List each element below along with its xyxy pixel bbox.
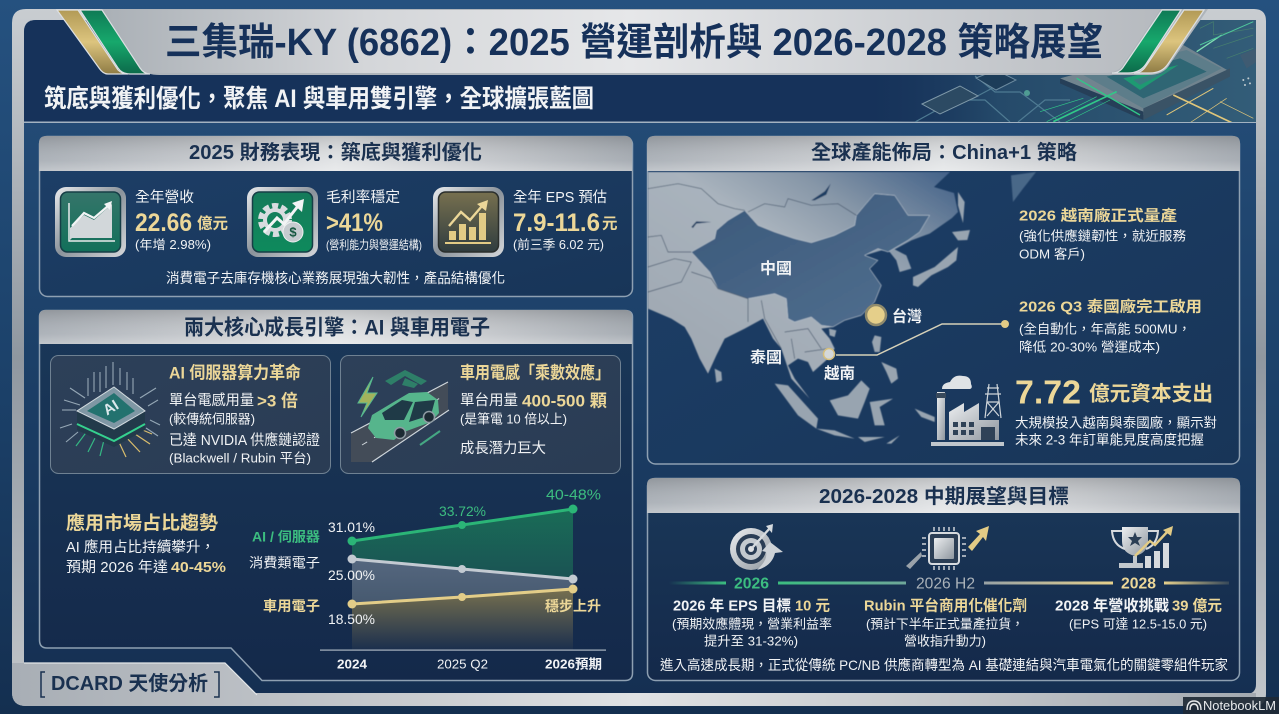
header band xyxy=(24,20,1256,123)
icon: EPS bars xyxy=(433,187,504,257)
line chart: market share xyxy=(249,486,606,672)
subtitle: 筑底與獲利優化，聚焦 AI 與車用雙引擎，全球擴張藍圖 xyxy=(44,85,594,113)
capex callout: 7.72 xyxy=(1015,374,1081,410)
automotive text xyxy=(460,362,610,457)
line chart: market share: 40-48% xyxy=(546,486,601,504)
panel: global capacity xyxy=(647,136,1240,464)
marker: Taiwan: 台灣 xyxy=(892,306,922,326)
market share trend text: 40-45% xyxy=(171,560,226,576)
AI server text xyxy=(169,362,320,466)
AI server text: (較傳統伺服器) xyxy=(169,412,255,426)
panel: outlook 2026-2028 xyxy=(647,478,1240,680)
milestone: 2026 H2: 營收指升動力) xyxy=(904,634,986,648)
icon: target xyxy=(730,524,783,570)
automotive text: 成長潛力巨大 xyxy=(460,440,546,457)
gross margin metric: >41% xyxy=(326,209,383,237)
panel heading: 全球產能佈局：China+1 策略 xyxy=(811,140,1077,164)
map of Asia xyxy=(648,172,1036,444)
title: 三集瑞-KY (6862)：2025 營運剖析與 2026-2028 策略展望 xyxy=(165,22,1103,64)
EPS metric xyxy=(513,189,618,252)
marker: Taiwan xyxy=(866,305,922,326)
line chart: market share: 穩步上升 xyxy=(545,598,601,614)
left gold and green ribbons xyxy=(57,10,150,74)
callout: Vietnam plant xyxy=(1019,206,1186,262)
milestone: 2026: 提升至 31-32%) xyxy=(704,634,798,648)
market share trend text: 預期 2026 年達 xyxy=(66,559,169,576)
line chart: market share: 33.72% xyxy=(439,503,486,519)
circuit board artwork xyxy=(860,20,1257,125)
AI server text: 已達 NVIDIA 供應鏈認證 xyxy=(169,431,320,449)
line chart: market share: 18.50% xyxy=(328,611,375,627)
callout: Thailand plant: (全自動化，年高能 500MU， xyxy=(1019,322,1191,336)
conclusion: 進入高速成長期，正式從傳統 PC/NB 供應商轉型為 AI 基礎連結與汽車電氣化的關鍵零組件玩家 xyxy=(660,657,1228,673)
revenue metric xyxy=(135,189,229,252)
gross margin metric: (營利能力與營運結構) xyxy=(326,237,422,252)
icon: gross margin gear: $ xyxy=(289,224,297,240)
revenue metric: 億元 xyxy=(197,214,229,232)
timeline: 2028 xyxy=(1121,576,1156,592)
capex callout: 大規模投入越南與泰國廠，顯示對 xyxy=(1015,414,1217,430)
capex callout xyxy=(1015,374,1217,448)
icon: gross margin gear xyxy=(247,187,318,257)
line chart: market share: 25.00% xyxy=(328,567,375,583)
panel: growth engines xyxy=(39,310,632,680)
milestone: 2026: (預期效應體現，營業利益率 xyxy=(672,616,832,632)
panel heading xyxy=(39,136,632,171)
revenue metric: 全年營收 xyxy=(135,189,194,206)
revenue metric: (年增 2.98%) xyxy=(135,237,211,252)
EPS metric: 元 xyxy=(602,216,618,232)
gross margin metric xyxy=(326,189,422,252)
marker: Vietnam with leader line xyxy=(824,320,1009,382)
map label: Thailand: 泰國 xyxy=(750,348,782,366)
line chart: market share: 車用電子 xyxy=(263,598,320,614)
panel heading xyxy=(39,310,632,344)
market share trend text: 應用市場占比趨勢 xyxy=(66,512,218,534)
AI server text: AI 伺服器算力革命 xyxy=(169,362,301,382)
line chart: market share: AI / 伺服器 xyxy=(252,530,321,544)
capex callout: 未來 2-3 年訂單能見度高度把握 xyxy=(1015,432,1204,448)
NotebookLM badge: NotebookLM xyxy=(1203,698,1276,713)
panel heading: 2025 財務表現：築底與獲利優化 xyxy=(189,140,482,164)
panel heading xyxy=(647,136,1240,171)
automotive text: 車用電感「乘數效應」 xyxy=(460,362,610,382)
line chart: market share: 消費類電子 xyxy=(249,556,320,570)
footer tab: DCARD xyxy=(12,663,1256,706)
AI server text: 單台電感用量 xyxy=(169,391,254,409)
AI server text: (Blackwell / Rubin 平台) xyxy=(169,450,311,466)
line chart: market share: 2026預期 xyxy=(545,656,602,672)
automotive text: 400-500 顆 xyxy=(522,392,607,410)
card: automotive xyxy=(340,356,620,474)
icon: chip with arrow xyxy=(906,526,989,570)
marker: Vietnam with leader line: 越南 xyxy=(824,364,855,382)
NotebookLM badge xyxy=(1183,697,1279,714)
callout: Vietnam plant: (強化供應鏈韌性，就近服務 xyxy=(1019,228,1186,244)
right green and gold ribbons xyxy=(1112,10,1204,73)
panel heading xyxy=(647,478,1240,513)
EPS metric: 7.9-11.6 xyxy=(513,209,600,237)
revenue metric: 22.66 xyxy=(135,209,192,237)
title banner xyxy=(57,9,1208,75)
milestone: 2028: 39 億元 xyxy=(1172,598,1222,614)
milestone: 2026 H2: (預計下半年正式量產拉貨， xyxy=(866,616,1024,632)
map label: China: 中國 xyxy=(760,260,792,278)
callout: Vietnam plant: 2026 越南廠正式量產 xyxy=(1019,206,1177,224)
icon: factory xyxy=(931,376,1004,446)
line chart: market share: 31.01% xyxy=(328,519,375,535)
market share trend text xyxy=(66,512,226,576)
panel heading: 兩大核心成長引擎：AI 與車用電子 xyxy=(184,316,490,340)
callout: Thailand plant xyxy=(1019,298,1202,354)
timeline: 2026 H2 xyxy=(916,576,975,592)
capex callout: 億元資本支出 xyxy=(1089,382,1213,406)
icon: electric car on road xyxy=(351,370,449,462)
milestone: 2026 H2 xyxy=(864,596,1027,648)
callout: Thailand plant: 降低 20-30% 營運成本) xyxy=(1019,340,1160,354)
milestone: 2026 xyxy=(672,596,832,648)
card: AI servers xyxy=(50,356,330,474)
milestone: 2028 xyxy=(1055,596,1222,632)
gross margin metric: 毛利率穩定 xyxy=(326,189,400,206)
timeline: 2026 xyxy=(734,576,769,592)
EPS metric: 全年 EPS 預估 xyxy=(513,189,607,206)
icon: trophy with growth bars xyxy=(1112,526,1173,568)
line chart: market share: 2024 xyxy=(337,656,368,672)
icon: revenue chart xyxy=(55,187,126,257)
milestone: 2026: 2026 年 EPS 目標 xyxy=(673,596,791,614)
panel: 2025 financials xyxy=(39,136,632,296)
callout: Thailand plant: 2026 Q3 泰國廠完工啟用 xyxy=(1019,298,1202,316)
icon: AI chip: AI xyxy=(100,397,122,419)
market share trend text: AI 應用占比持續攀升， xyxy=(66,538,215,556)
callout: Vietnam plant: ODM 客戶) xyxy=(1019,246,1085,262)
EPS metric: (前三季 6.02 元) xyxy=(513,237,604,252)
automotive text: 單台用量 xyxy=(460,392,518,409)
timeline xyxy=(669,576,1229,592)
AI server text: >3 倍 xyxy=(257,390,298,410)
footer tab: DCARD: DCARD 天使分析 xyxy=(51,672,208,695)
milestone: 2026: 10 元 xyxy=(795,598,830,614)
summary note: 消費電子去庫存機核心業務展現強大韌性，產品結構優化 xyxy=(166,270,505,286)
line chart: market share: 2025 Q2 xyxy=(437,656,488,672)
milestone: 2028: 2028 年營收挑戰 xyxy=(1055,596,1169,614)
milestone: 2028: (EPS 可達 12.5-15.0 元) xyxy=(1069,616,1207,632)
milestone: 2026 H2: Rubin 平台商用化催化劑 xyxy=(864,596,1027,614)
panel heading: 2026-2028 中期展望與目標 xyxy=(819,485,1069,508)
automotive text: (是筆電 10 倍以上) xyxy=(460,412,567,426)
icon: AI chip xyxy=(60,362,160,457)
